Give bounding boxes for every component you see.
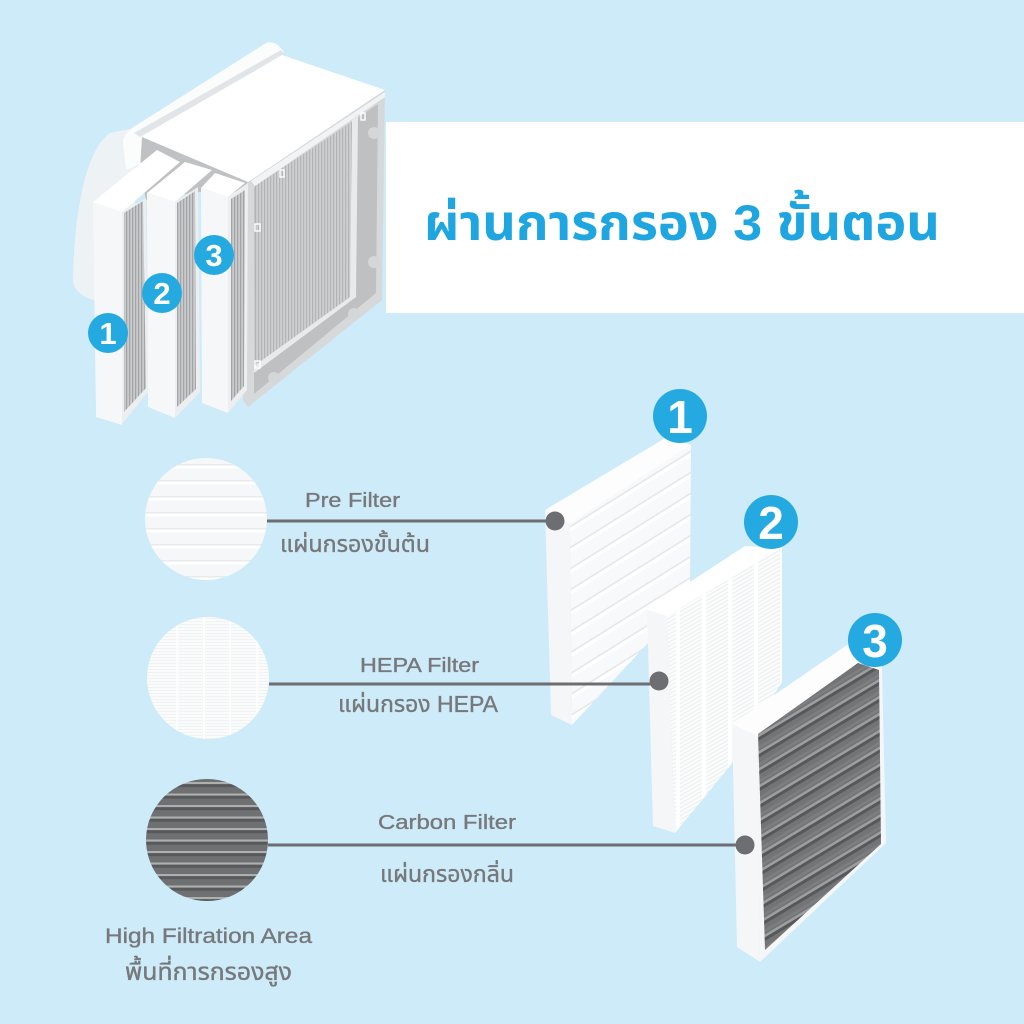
label: carbon filter: แผ่นกรองกลิ่น	[380, 859, 514, 887]
label: pre filter: แผ่นกรองขั้นต้น	[280, 529, 430, 557]
housing slot	[140, 137, 250, 200]
exploded filter 2: HEPA filter	[647, 546, 782, 833]
badge 3: 3	[205, 238, 223, 273]
frame clips	[255, 113, 365, 368]
badge: exploded filter 1	[653, 389, 707, 443]
label: carbon filter: Carbon Filter	[378, 812, 516, 834]
purifier frame	[243, 90, 385, 407]
filter 3 in housing	[201, 173, 248, 413]
exploded filter 1: pre filter	[545, 437, 691, 725]
exploded filter 3: carbon filter	[732, 645, 886, 962]
label: pre filter	[280, 490, 430, 557]
label: HEPA filter	[338, 655, 499, 717]
swatch: pre filter texture	[145, 458, 267, 580]
label: HEPA filter: แผ่นกรอง HEPA	[338, 691, 499, 717]
purifier rear plate	[123, 42, 284, 170]
connector: HEPA filter	[269, 672, 668, 690]
badge 1: 1	[99, 316, 117, 351]
badge: exploded filter 3: 3	[862, 615, 888, 667]
caption: high filtration area: High Filtration Area	[105, 925, 312, 948]
swatch: HEPA filter texture	[147, 617, 269, 739]
frame pegs	[268, 127, 380, 384]
purifier rear dome	[73, 128, 135, 302]
back mesh panel	[254, 122, 352, 366]
badge: exploded filter 2: 2	[758, 497, 784, 549]
white title banner	[386, 122, 1024, 313]
badge 1	[88, 313, 128, 353]
connector: pre filter	[267, 512, 564, 530]
title: ผ่านการกรอง 3 ขั้นตอน	[424, 190, 940, 251]
badge: exploded filter 1: 1	[667, 391, 693, 443]
caption: high filtration area	[105, 925, 312, 987]
label: carbon filter	[378, 812, 516, 887]
badge: exploded filter 2	[744, 495, 798, 549]
product illustration: purifier with three filters	[73, 42, 385, 425]
filter 1 in housing	[93, 150, 180, 425]
label: pre filter: Pre Filter	[305, 490, 400, 512]
swatch: carbon filter texture	[146, 779, 268, 901]
filter 2 in housing	[147, 162, 212, 418]
label: HEPA filter: HEPA Filter	[360, 655, 479, 677]
badge: exploded filter 3	[848, 613, 902, 667]
purifier top face	[142, 55, 385, 182]
badge 2	[142, 273, 182, 313]
caption: high filtration area: พื้นที่การกรองสูง	[125, 955, 292, 987]
badge 3	[194, 235, 234, 275]
badge 2: 2	[153, 276, 171, 311]
connector: carbon filter	[268, 836, 754, 854]
